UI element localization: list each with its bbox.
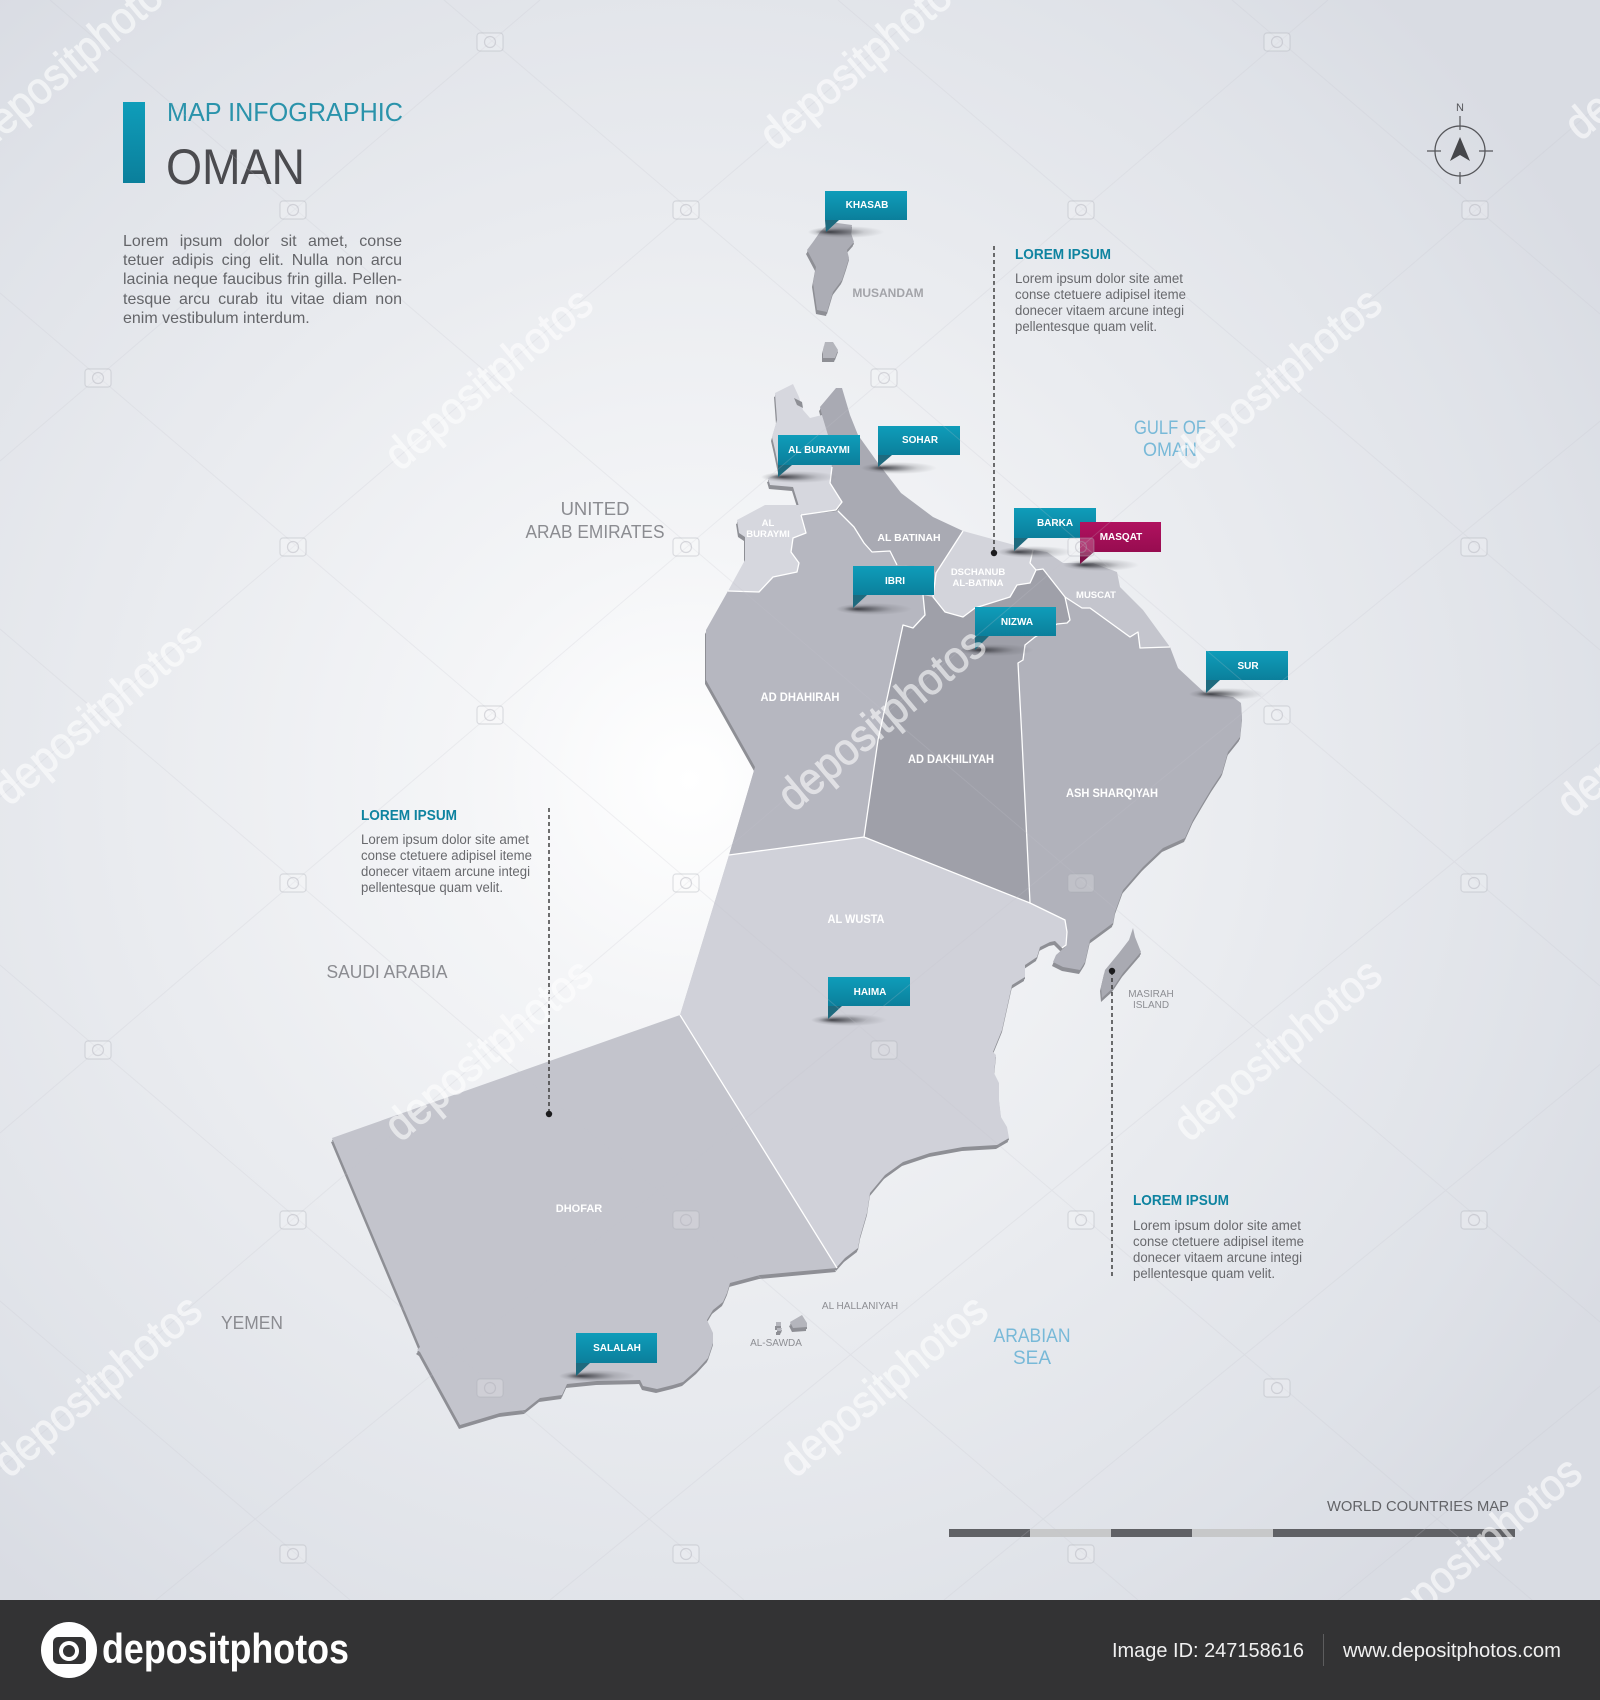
minor geography labels: MASIRAH [1128,989,1174,1000]
callout: top: conse ctetuere adipisel iteme [1015,287,1186,302]
minor geography labels: ISLAND [1133,1000,1169,1011]
country labels: ARAB EMIRATES [526,521,664,542]
minor geography labels: MUSANDAM [852,286,924,300]
stock watermark overlay: text: depositphotos [1163,277,1391,480]
callout: bottom right [1109,968,1304,1281]
flag: Khasab: KHASAB [846,200,888,211]
callout: bottom right: LOREM IPSUM [1133,1192,1229,1209]
Hallaniyah islands [776,1315,807,1331]
callout: left: conse ctetuere adipisel iteme [361,848,532,863]
scale title: WORLD COUNTRIES MAP [1327,1498,1509,1515]
flag: Masqat: MASQAT [1100,532,1142,543]
region labels: ASH SHARQIYAH [1066,786,1158,800]
Masirah island [1101,928,1141,998]
region: Dhofar [332,1015,837,1425]
flag: Ibri: IBRI [885,576,905,587]
callout: top: Lorem ipsum dolor site amet [1015,271,1183,286]
stock watermark overlay: text: depositphotos [374,277,602,480]
region: Al Batinah [820,388,963,573]
flag: Haima: HAIMA [854,987,886,998]
intro paragraph: lacinia neque faucibus frin gilla. Pellen- [123,271,402,288]
stock watermark overlay: text: depositphotos [1163,948,1391,1151]
sea labels [994,418,1206,1369]
region: Ad Dakhiliyah [864,569,1070,903]
flag: Sur [1189,651,1288,700]
callout: bottom right: donecer vitaem arcune integi [1133,1250,1302,1265]
region: Ad Dhahirah [706,511,936,855]
map of Oman [331,222,1242,1429]
region: Al Wusta [680,837,1067,1267]
icon: camera logo [41,1622,97,1678]
flag: Masqat [1063,522,1161,571]
region labels: AD DAKHILIYAH [908,752,994,766]
region labels: DSCHANUB [951,567,1005,578]
callout: bottom right: Lorem ipsum dolor site amet [1133,1218,1301,1233]
callout: top: pellentesque quam velit. [1015,319,1157,334]
country labels [221,498,664,1333]
callout: left [361,807,552,1117]
flag: Khasab [808,191,907,238]
title: Oman: OMAN [166,139,305,195]
image id: Image ID: 247158616 [1112,1640,1304,1662]
website: www.depositphotos.com [1342,1640,1561,1662]
region: Ash Sharqiyah [1018,597,1242,970]
flag: Sur: SUR [1237,661,1259,672]
stock watermark overlay: text: depositphotos [769,1284,997,1487]
minor geography labels [750,286,1174,1349]
region labels: AL [762,518,775,529]
callout: left: pellentesque quam velit. [361,880,503,895]
intro paragraph: tesque arcu curab itu vitae diam non [123,291,402,308]
intro paragraph [123,233,402,327]
region labels [556,518,1158,1215]
intro paragraph: tetuer adipis cing elit. Nulla non arcu [123,252,402,269]
sea labels: ARABIAN [994,1326,1070,1347]
flag: Salalah [559,1333,657,1382]
callout: top: donecer vitaem arcune integi [1015,303,1184,318]
region labels: AL BATINAH [877,532,941,544]
sea labels: GULF OF [1134,418,1206,439]
flag: Sohar: SOHAR [902,435,939,446]
intro paragraph: enim vestibulum interdum. [123,310,310,327]
region labels: AL WUSTA [828,912,885,926]
flag: Nizwa: NIZWA [1001,617,1033,628]
flag: Haima [811,977,910,1026]
callout: top [991,246,1186,556]
region: Muscat [1030,550,1170,648]
country labels: UNITED [561,498,629,519]
compass icon [1427,102,1493,184]
region labels: AL-BATINA [952,578,1004,589]
compass icon: N [1456,102,1464,114]
region labels: AD DHAHIRAH [760,690,840,704]
sea labels: SEA [1013,1348,1051,1369]
region labels: DHOFAR [556,1203,602,1215]
callout: bottom right: pellentesque quam velit. [1133,1266,1275,1281]
region labels: BURAYMI [746,529,790,540]
callout: bottom right: conse ctetuere adipisel iteme [1133,1234,1304,1249]
callout: left: donecer vitaem arcune integi [361,864,530,879]
region: Al Buraymi [728,505,806,592]
flag: Barka [997,508,1096,558]
flag: Al Buraymi: AL BURAYMI [788,445,850,456]
minor geography labels: AL HALLANIYAH [822,1301,898,1312]
region labels: MUSCAT [1076,590,1116,601]
callout: left: Lorem ipsum dolor site amet [361,832,529,847]
flag: Salalah: SALALAH [593,1343,641,1354]
accent bar [123,102,145,183]
stock watermark overlay: text: depositphotos [374,948,602,1151]
region: northern exclave [768,384,842,515]
region: Dschanub Al-Batina [923,531,1036,617]
country labels: SAUDI ARABIA [326,961,448,982]
country labels: YEMEN [221,1312,283,1333]
callout: left: LOREM IPSUM [361,807,457,824]
region: Musandam [807,222,854,312]
flag: Sohar [861,426,960,474]
flag: Al Buraymi [761,435,860,483]
title: map infographic: MAP INFOGRAPHIC [167,97,403,127]
flag: Nizwa [958,607,1056,656]
scale bar [949,1529,1515,1537]
flag: Ibri [836,566,934,615]
logo wordmark: depositphotos [102,1625,349,1672]
footer band [0,1600,1600,1700]
small island [823,342,838,358]
intro paragraph: Lorem ipsum dolor sit amet, conse [123,233,402,250]
sea labels: OMAN [1143,440,1197,461]
minor geography labels: AL-SAWDA [750,1338,802,1349]
callout: top: LOREM IPSUM [1015,246,1111,263]
flag: Barka: BARKA [1037,518,1073,529]
stock watermark overlay: text: depositphotos [767,618,995,821]
